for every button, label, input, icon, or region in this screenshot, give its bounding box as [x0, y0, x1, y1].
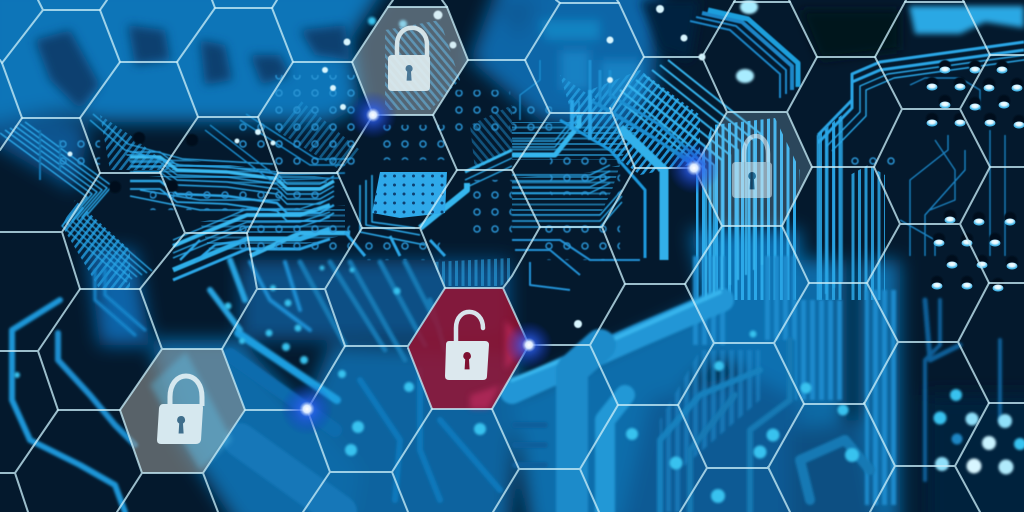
hexagon fill: right lock [694, 112, 812, 226]
icon: padlock bottom left [157, 376, 203, 444]
circuit traces: sharp central bundles [0, 10, 1024, 300]
hexagon fill: red lock [408, 288, 529, 409]
microchip pad [372, 172, 447, 218]
icon: padlock top [388, 28, 430, 91]
hexagon fill: top lock [352, 7, 468, 115]
dark patches in the top blurred area [35, 0, 900, 110]
sharp striped trace bundles [62, 20, 885, 300]
icon: open padlock red [445, 312, 489, 380]
soft striped bundles in the out-of-focus area [660, 256, 897, 512]
icon: padlock right [732, 136, 772, 198]
bright top right pad [909, 6, 1024, 34]
solder pad rings [60, 75, 900, 260]
metallic solder caps [109, 60, 1024, 292]
circuit traces: large blurred bands [12, 260, 1000, 512]
lens flares [281, 91, 720, 435]
hexagon fill: bottom-left lock [120, 349, 245, 473]
